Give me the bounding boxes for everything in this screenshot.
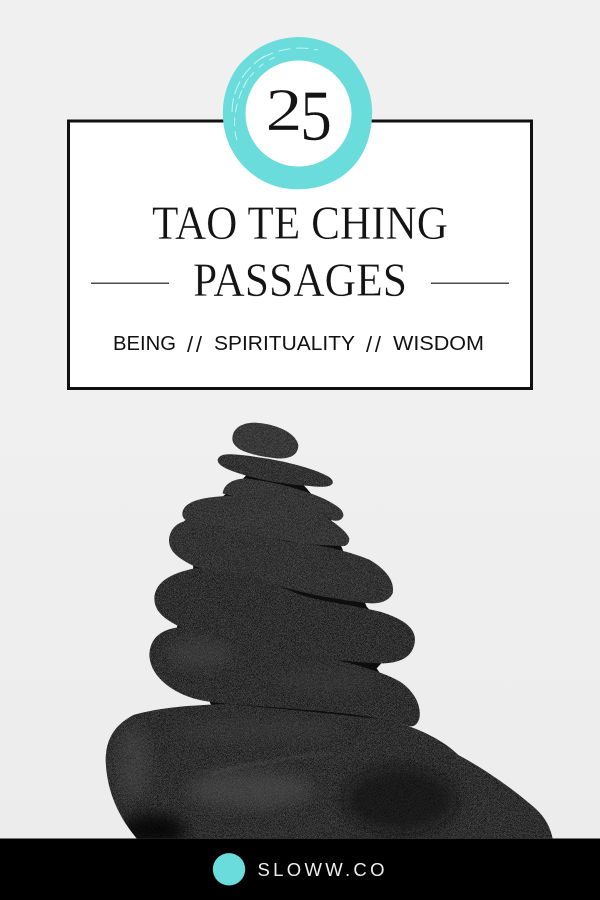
stone: base rock bbox=[106, 704, 553, 847]
heading line 2: PASSAGES bbox=[193, 254, 407, 307]
stone: top bbox=[232, 423, 298, 458]
stone: third bbox=[223, 479, 343, 521]
tagline bbox=[113, 332, 484, 357]
stone: sixth bbox=[154, 568, 415, 663]
footer bar bbox=[0, 838, 600, 900]
stone: fifth bbox=[169, 520, 393, 603]
heading line 1: TAO TE CHING bbox=[152, 197, 448, 250]
tagline: SPIRITUALITY bbox=[214, 332, 355, 355]
title panel bbox=[68, 37, 532, 388]
footer brand: SLOWW.CO bbox=[258, 859, 384, 880]
photo: stacked stones bbox=[106, 423, 553, 847]
stone: seventh bbox=[149, 627, 420, 726]
tagline: // bbox=[366, 332, 382, 357]
brush ring bbox=[223, 37, 372, 189]
stone: second bbox=[218, 454, 333, 487]
tagline: BEING bbox=[113, 332, 176, 355]
stone: fourth bbox=[182, 494, 349, 546]
rule right bbox=[431, 283, 509, 284]
footer dot bbox=[213, 853, 245, 886]
number 25: 5 bbox=[300, 76, 332, 156]
brush strokes bbox=[232, 48, 318, 140]
tagline: WISDOM bbox=[393, 332, 484, 355]
stones: dark backing mass bbox=[177, 460, 405, 730]
tagline: // bbox=[187, 332, 203, 357]
panel frame bbox=[68, 121, 532, 388]
rule left bbox=[91, 283, 169, 284]
ring centre bbox=[246, 60, 352, 166]
badge: brush ring with number bbox=[223, 37, 372, 189]
number 25 bbox=[266, 76, 332, 156]
number 25: 2 bbox=[266, 77, 302, 143]
